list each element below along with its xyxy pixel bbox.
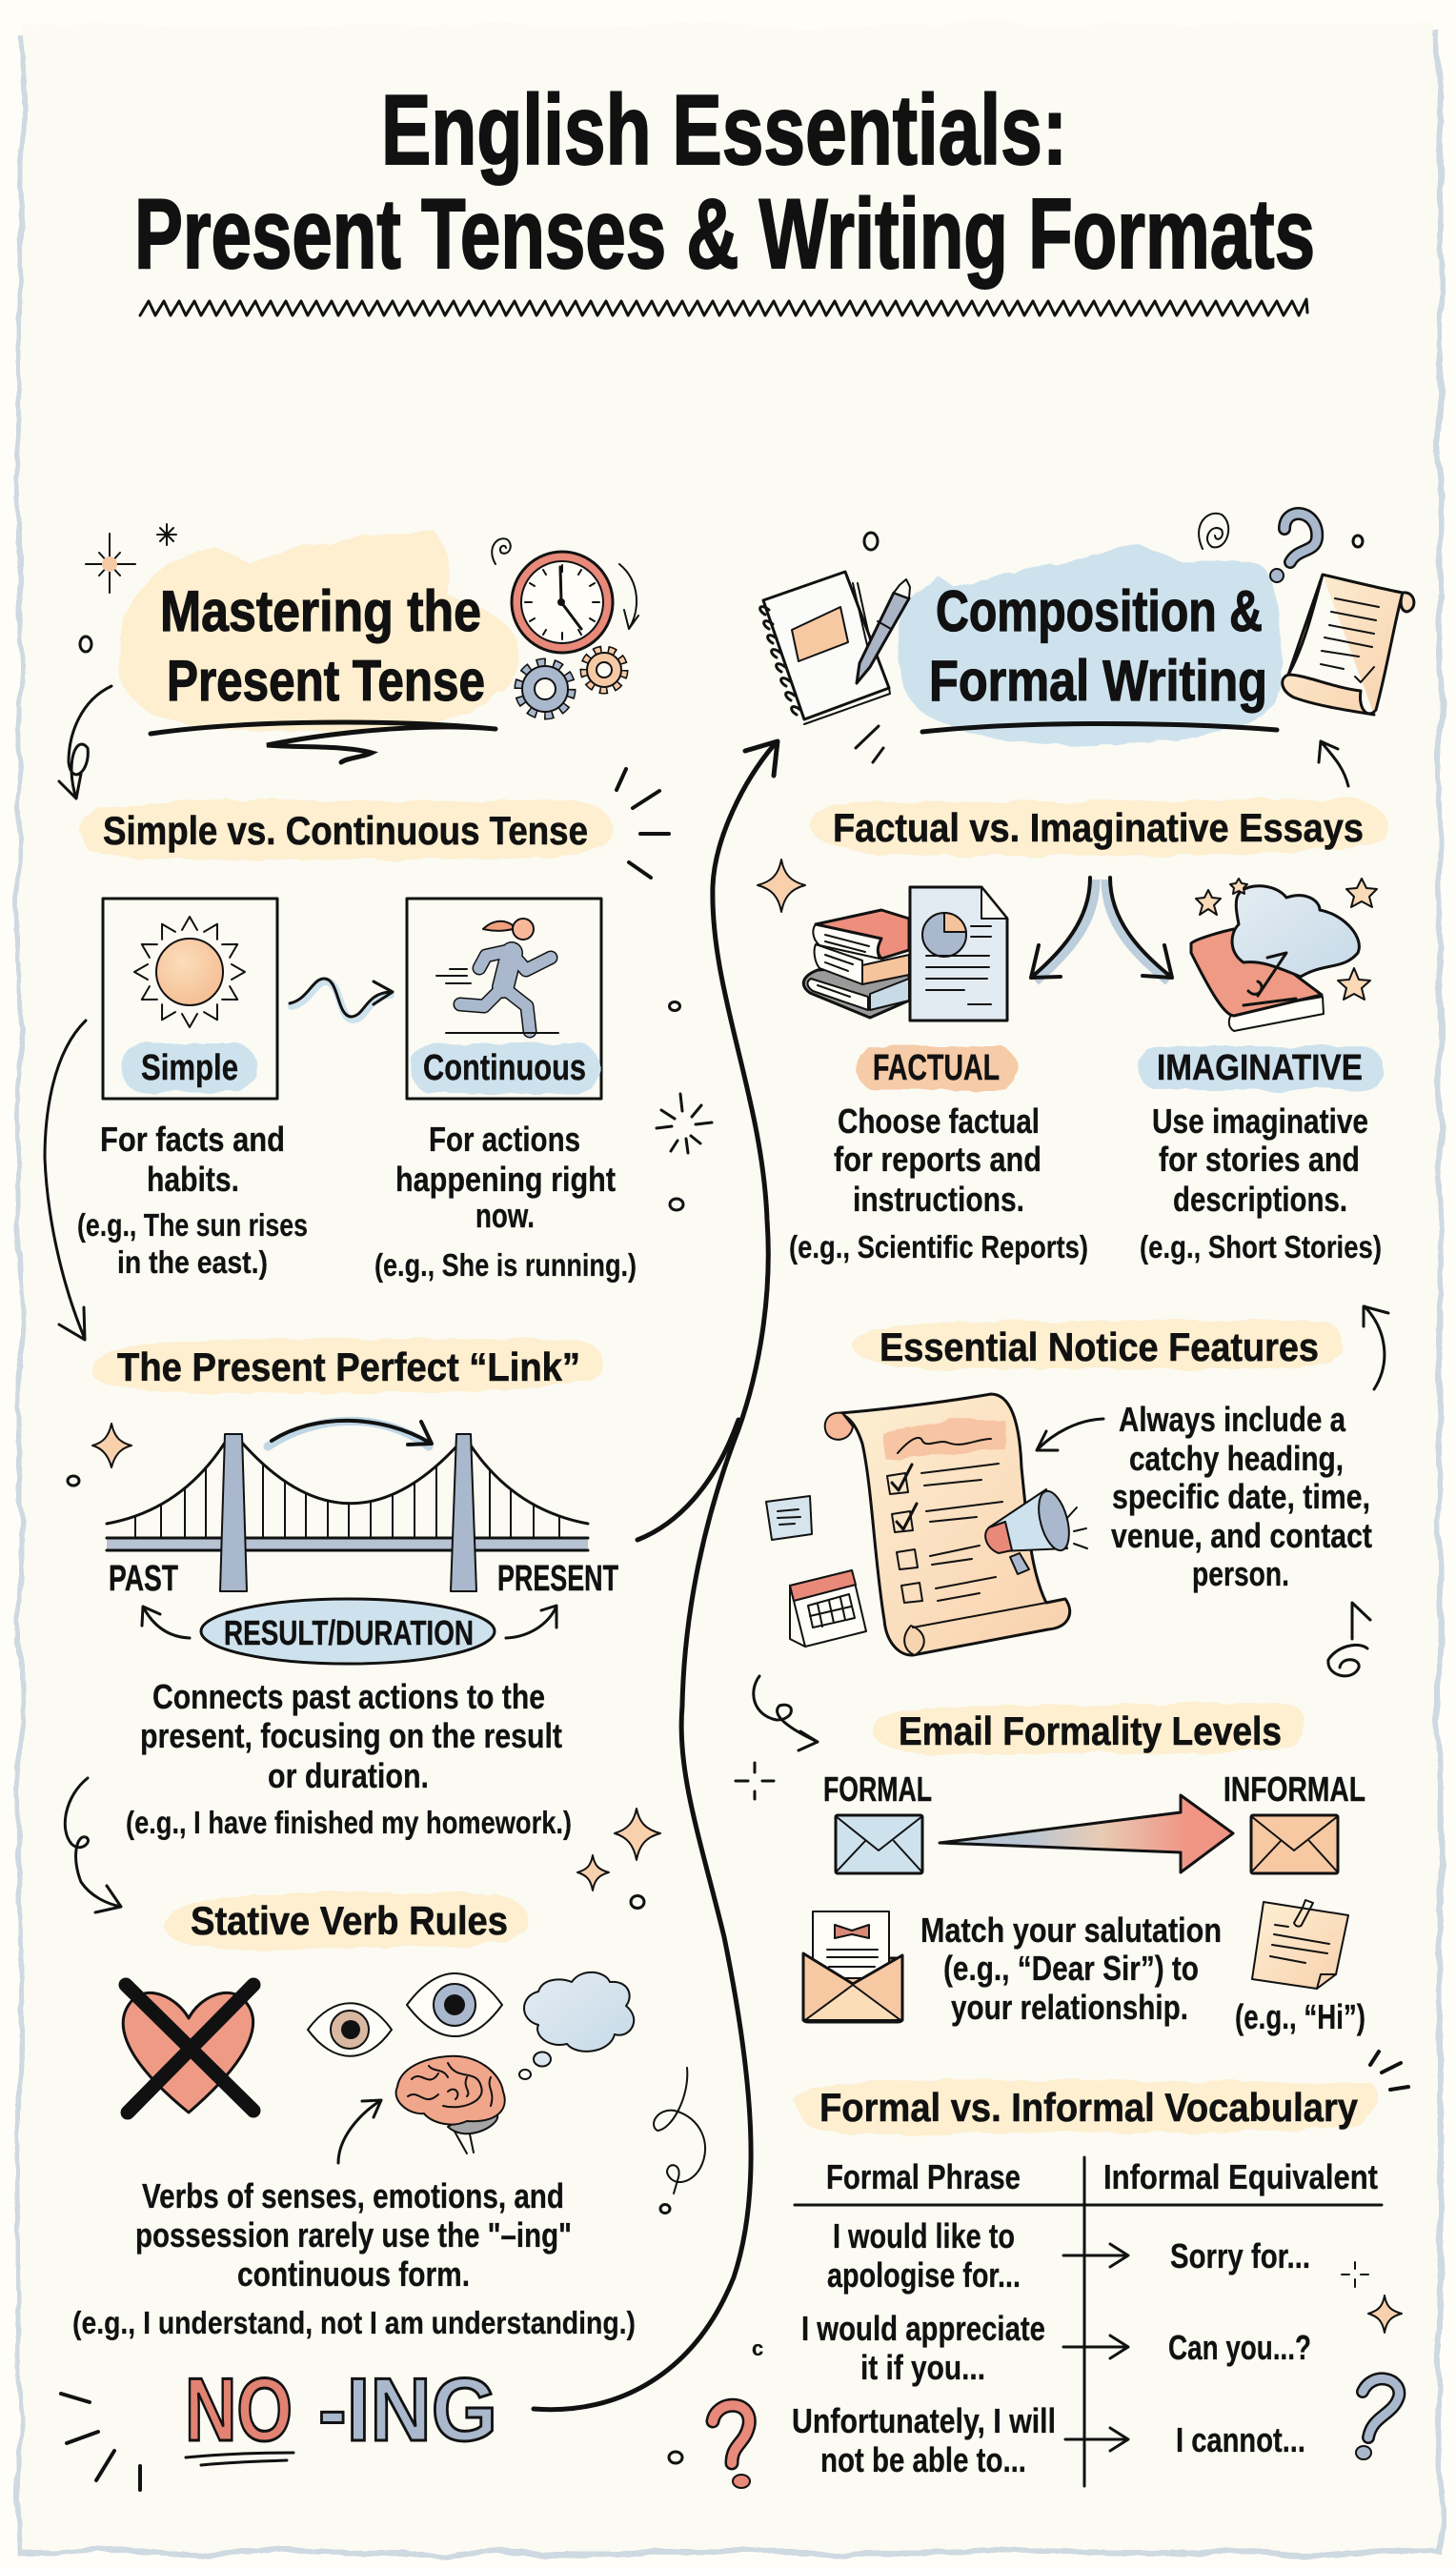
panel: Essential Notice Features [766,1321,1372,1676]
text: salutation [920,1911,1222,2027]
arrow to brain [338,2100,381,2163]
factual column [789,1046,1088,1264]
panel: Formal vs Informal Vocabulary [752,2052,1408,2486]
label: factual: FACTUAL [873,1048,1000,1088]
text: factual description: (e.g., Scientific Reports) [789,1229,1088,1264]
icon: thought cloud [519,1972,634,2079]
heading text [160,579,485,713]
heading text: Present Tense [167,649,485,713]
row 1 [827,2216,1310,2295]
text: present perfect description [126,1677,572,1840]
bridge illustration [107,1434,588,1591]
icon: red question mark [713,2405,750,2488]
icon: scroll checklist [1283,575,1414,715]
label: imaginative: IMAGINATIVE [1157,1048,1363,1088]
burst marks [61,2394,140,2490]
text: imaginative description [1140,1102,1382,1264]
text: factual description: instructions. [853,1180,1024,1219]
labels past and present: PRESENT [497,1559,618,1599]
icon: notebook [760,572,890,724]
label: continuous [412,1043,598,1093]
card: simple [103,899,277,1099]
icon: story book with cloud [1191,886,1359,1031]
icon: report document [910,887,1007,1021]
arrow to scroll [1037,1419,1103,1450]
title: English Essentials: [381,75,1067,186]
burst marks [617,769,669,878]
row 2: Can you...? [1168,2328,1311,2367]
text: imaginative description: (e.g., Short Stories) [1140,1229,1382,1264]
text: imaginative description: Use imaginative [1152,1102,1368,1141]
heading text [929,579,1267,713]
row 1: I would like to [833,2216,1015,2255]
stars [1196,879,1377,1000]
swirl arrow [65,1778,121,1912]
section heading: Stative Verb Rules [191,1898,508,1943]
section heading: Formal vs. Informal Vocabulary [819,2085,1359,2130]
icon: asterisk [157,524,176,545]
text: notice features: catchy heading, [1129,1439,1344,1478]
table header: Formal Phrase [826,2157,1021,2196]
example: hi: (e.g., “Hi”) [1235,1997,1365,2036]
text: stative description [72,2176,636,2340]
icon: pen [857,579,910,683]
text: salutation: (e.g., “Dear Sir”) to [943,1949,1199,1988]
text: imaginative description: descriptions. [1173,1180,1347,1219]
icon: calendar [790,1570,866,1647]
decorative circles and burst [657,1002,712,1210]
small circles [660,2205,682,2463]
label: continuous: Continuous [423,1048,586,1088]
text: salutation: Match your salutation [920,1911,1222,1950]
text: present perfect description: Connects past actions to the [152,1677,545,1716]
panel: Stative Verb Rules [61,1891,750,2490]
text: present perfect description: or duration. [268,1756,429,1795]
text: notice features: venue, and contact [1111,1516,1372,1555]
text: stative description: possession rarely use the "–ing" [135,2215,572,2255]
row 3: Unfortunately, I will [792,2401,1056,2440]
panel: Simple vs Continuous Tense [45,769,712,1340]
text: salutation: your relationship. [951,1988,1188,2027]
icon: brown eye [308,2003,392,2056]
burst marks [1370,2052,1408,2090]
title [134,75,1315,290]
text: continuous description: now. [475,1196,535,1235]
arrows from ellipse [142,1606,556,1638]
heading blob [898,544,1283,746]
labels past and present: PAST [109,1559,178,1599]
icon: blue question mark [1356,2378,1399,2459]
panel: Present Perfect Link [65,1339,660,1912]
row 2: I would appreciate [801,2309,1045,2348]
table header: Informal Equivalent [1103,2157,1378,2196]
label: simple: Simple [141,1048,238,1088]
curved arrow over bridge [268,1421,432,1446]
heading text: Mastering the [160,579,481,643]
heading blob [118,530,520,732]
text: notice features: Always include a [1119,1400,1346,1439]
table: vocabulary [792,2157,1382,2486]
label: simple [122,1043,256,1093]
star [758,859,805,912]
result/duration ellipse: RESULT/DURATION [224,1613,474,1652]
small circles [864,533,1363,550]
section heading: Simple vs. Continuous Tense [103,808,588,853]
text: present perfect description: (e.g., I have finished my homework.) [126,1805,572,1840]
text: factual description: for reports and [834,1140,1041,1179]
icon: clock rotation arrow [619,564,638,629]
gradient arrow [940,1795,1233,1872]
forking arrows [1031,878,1172,981]
panel: Mastering the Present Tense [59,524,638,799]
text: stative description: continuous form. [237,2255,470,2294]
star [92,1424,131,1467]
labels formal and informal [823,1769,1365,1809]
panel: Composition and Formal Writing [760,514,1414,786]
icon: spiral [492,538,511,564]
heading text: Composition & [936,579,1263,643]
text: factual description: Choose factual [838,1102,1040,1141]
icon: notice scroll [825,1394,1070,1655]
row 3: not be able to... [820,2440,1026,2479]
small arrow [1319,741,1348,786]
text: continuous description: For actions [429,1120,580,1159]
text: simple description: in the east.) [117,1244,268,1280]
no-ing lettering: -ING [318,2359,497,2459]
long arrow to present perfect [45,1021,86,1340]
row 3 [792,2401,1305,2479]
no-ing lettering [185,2359,497,2465]
row 1: apologise for... [827,2255,1021,2295]
sparkle marks [1342,2262,1368,2287]
heading underline scribble [151,722,495,762]
row 2 [801,2309,1311,2387]
section heading: Essential Notice Features [880,1324,1319,1369]
small circle [68,1476,79,1486]
labels formal and informal: FORMAL [823,1769,932,1809]
icon: megaphone [985,1487,1087,1574]
no-ing lettering: NO [185,2359,293,2459]
result/duration ellipse [201,1599,495,1664]
text: simple description [77,1120,308,1280]
text: continuous description [374,1120,637,1283]
icon: brain [396,2056,505,2153]
panel: Factual vs Imaginative Essays [758,799,1388,1389]
text: continuous description: happening right [395,1160,616,1199]
card: continuous [407,899,601,1099]
heading text: Formal Writing [929,649,1267,713]
spiral arrow [1328,1603,1370,1676]
icon: runner [436,919,558,1033]
main connector arrow from NO-ING and bridge up to Composition [534,741,778,2410]
section heading: Email Formality Levels [899,1709,1282,1753]
squiggle [654,2068,705,2194]
icon: clock [512,552,613,653]
text: imaginative description: for stories and [1159,1140,1360,1179]
row 3: I cannot... [1176,2420,1305,2459]
icon: spiral [1199,514,1228,549]
labels formal and informal: INFORMAL [1223,1769,1365,1809]
icon: question mark [1270,514,1317,582]
section heading: Factual vs. Imaginative Essays [833,805,1364,850]
title zigzag underline [140,299,1307,315]
small letter mark: c [752,2336,763,2360]
icon: note card [766,1496,812,1540]
accent ticks [856,726,883,762]
icon: sparkle [86,534,135,593]
text: simple description: habits. [147,1160,239,1199]
row 1: Sorry for... [1170,2236,1310,2275]
icon: open envelope with letter [803,1911,902,2022]
labels past and present [109,1559,618,1599]
icon: sticky note [1252,1900,1348,1989]
small circle [80,637,91,652]
star [1368,2295,1402,2333]
imaginative column [1139,1046,1383,1264]
text: factual description [789,1102,1088,1264]
icon: stacked books [803,910,909,1018]
swirl arrow [754,1676,818,1750]
section heading: The Present Perfect “Link” [117,1345,580,1389]
section heading [78,800,613,859]
swirl arrow [59,686,111,799]
text: simple description: (e.g., The sun rises [77,1207,308,1243]
text: continuous description: (e.g., She is running.) [374,1247,637,1283]
sparkle marks [736,1763,774,1799]
icon: crossed heart [123,1985,253,2113]
text: stative description: (e.g., I understand, not I am understanding.) [72,2305,636,2340]
wavy arrow [290,979,393,1020]
row 2: it if you... [860,2348,985,2387]
text: present perfect description: present, focusing on the result [140,1716,562,1755]
curved arrow up [1364,1306,1388,1389]
table header [826,2157,1378,2196]
icon: formal envelope [836,1815,922,1873]
icon: gears [520,651,623,714]
text: notice features: person. [1192,1554,1289,1593]
icon: sun [134,917,245,1027]
heading underline [922,724,1277,732]
text: notice features [1111,1400,1372,1593]
icon: informal envelope [1251,1815,1338,1873]
icon: blue eye [407,1973,502,2036]
panel: Email Formality Levels [736,1676,1365,2036]
text: stative description: Verbs of senses, emotions, and [142,2176,564,2215]
stars and circle [577,1809,660,1908]
text: simple description: For facts and [100,1120,285,1159]
text: notice features: specific date, time, [1112,1477,1370,1516]
